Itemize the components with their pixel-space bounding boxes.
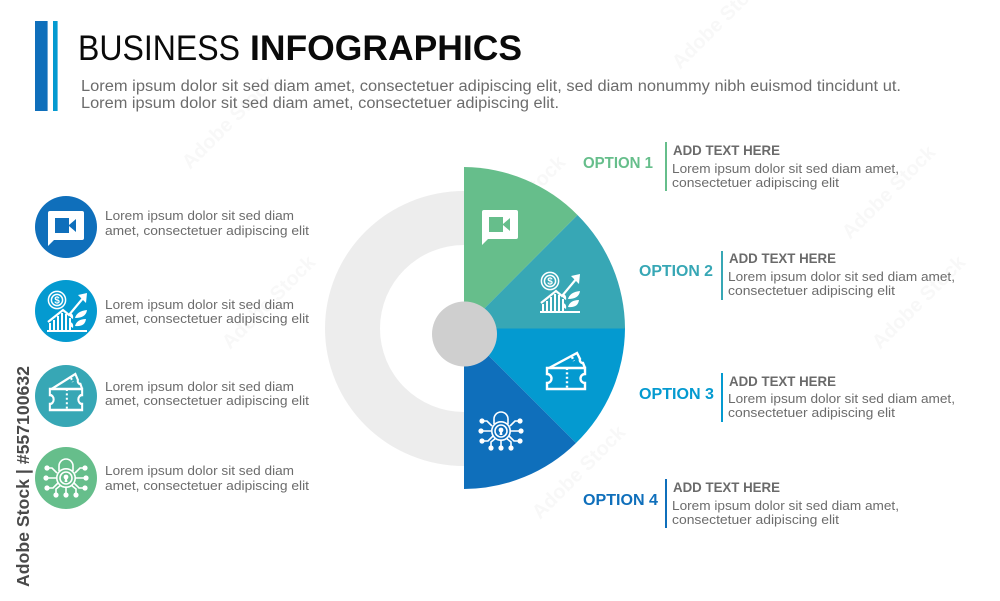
option 4: OPTION 4 [583, 492, 658, 509]
left icon list [35, 196, 310, 509]
option 3 [639, 373, 955, 422]
background watermark: Adobe Stock [468, 151, 571, 254]
option 1: consectetuer adipiscing elit [672, 176, 840, 190]
segment 2 teal [464, 215, 625, 329]
option 2: Lorem ipsum dolor sit sed diam amet, [728, 270, 955, 284]
option 4: Lorem ipsum dolor sit sed diam amet, [672, 499, 899, 513]
semicircle diagram [325, 167, 625, 489]
list item 4: amet, consectetuer adipiscing elit [105, 479, 310, 493]
list item 4 [35, 447, 310, 509]
segment 1 green [464, 167, 578, 329]
title: BUSINESS [78, 29, 240, 68]
option 1: OPTION 1 [583, 155, 653, 172]
option 4: consectetuer adipiscing elit [672, 513, 840, 527]
grey ring [325, 191, 464, 466]
header accent bars [35, 21, 58, 111]
background watermark: Adobe Stock [218, 251, 321, 354]
option 1 [583, 142, 899, 191]
stock credit: Adobe Stock | #557100632 [13, 366, 33, 587]
icon: growth chart [540, 272, 580, 312]
list item 4: Lorem ipsum dolor sit sed diam [105, 464, 294, 478]
option 2: ADD TEXT HERE [729, 250, 836, 266]
background watermark: Adobe Stock [528, 421, 631, 524]
option 2: OPTION 2 [639, 263, 713, 280]
option 1: ADD TEXT HERE [673, 142, 780, 158]
segment 3 blue [464, 328, 625, 443]
list item 1: amet, consectetuer adipiscing elit [105, 224, 310, 238]
list item 3: amet, consectetuer adipiscing elit [105, 394, 310, 408]
icon: digital lock [478, 412, 524, 451]
title: INFOGRAPHICS [250, 29, 522, 68]
option 1: Lorem ipsum dolor sit sed diam amet, [672, 162, 899, 176]
option 4: ADD TEXT HERE [673, 479, 780, 495]
background watermark: Adobe Stock [838, 141, 941, 244]
option 3: ADD TEXT HERE [729, 373, 836, 389]
intro text [81, 78, 901, 112]
list item 3 [35, 365, 310, 427]
option 4 [583, 479, 899, 528]
intro text: Lorem ipsum dolor sit sed diam amet, consectetuer adipiscing elit. [81, 95, 559, 112]
list item 2: Lorem ipsum dolor sit sed diam [105, 298, 294, 312]
list item 2: amet, consectetuer adipiscing elit [105, 312, 310, 326]
option 3: OPTION 3 [639, 386, 714, 403]
icon: video chat [482, 210, 518, 245]
centre circle [432, 302, 497, 366]
intro text: Lorem ipsum dolor sit sed diam amet, consectetuer adipiscing elit, sed diam nonummy nibh euismod tincidunt ut. [81, 78, 901, 95]
segment 4 dark blue [464, 331, 576, 489]
option 3: consectetuer adipiscing elit [728, 406, 896, 420]
option 2 [639, 250, 955, 300]
icon: ticket [547, 353, 585, 389]
list item 3: Lorem ipsum dolor sit sed diam [105, 380, 294, 394]
background watermark [178, 0, 971, 524]
list item 1 [35, 196, 310, 258]
list item 2 [35, 280, 310, 342]
background watermark: Adobe Stock [178, 71, 281, 174]
list item 1: Lorem ipsum dolor sit sed diam [105, 209, 294, 223]
option 3: Lorem ipsum dolor sit sed diam amet, [728, 392, 955, 406]
background watermark: Adobe Stock [868, 251, 971, 354]
option 2: consectetuer adipiscing elit [728, 284, 896, 298]
